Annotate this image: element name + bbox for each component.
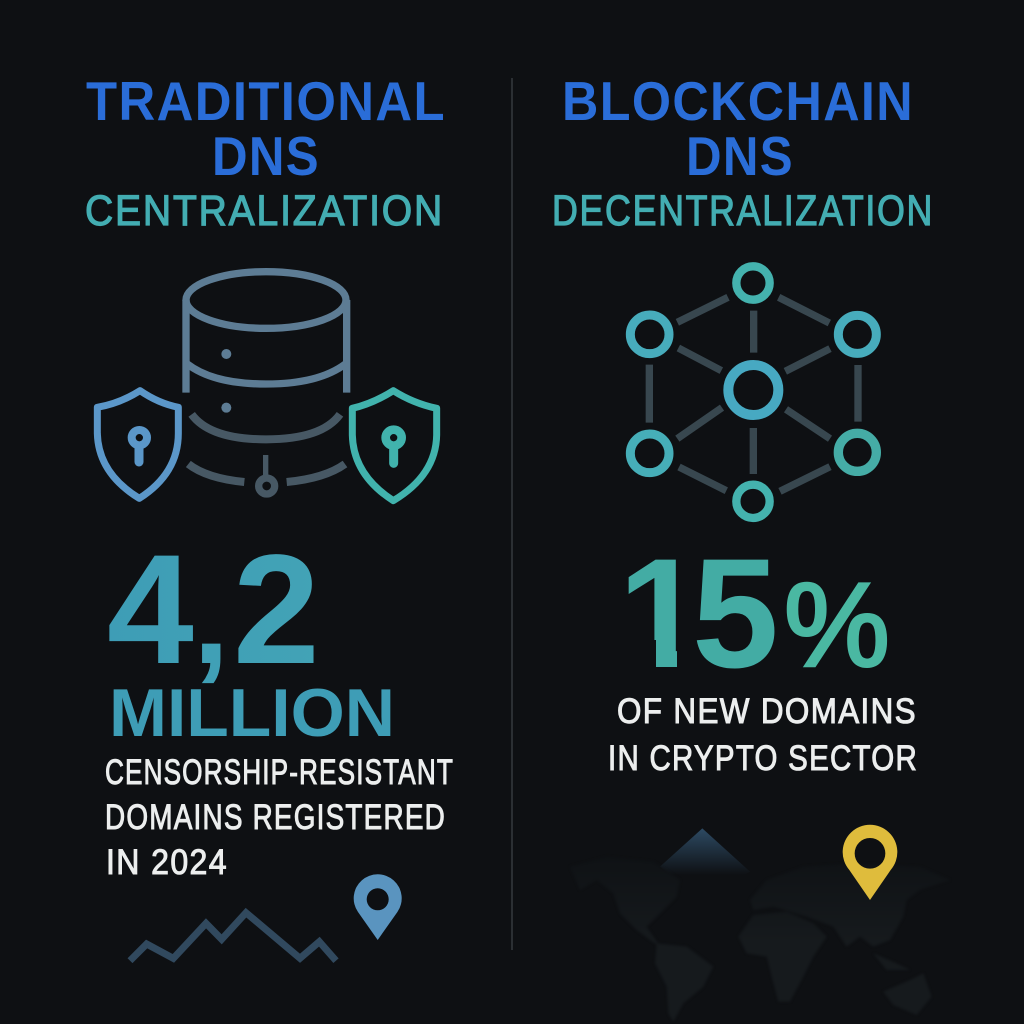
text block: censorship-resistant domains: IN 2024	[106, 843, 228, 882]
stat: 4,2: ,	[193, 545, 229, 691]
stat: 15 percent: 1	[618, 527, 705, 701]
icon: database cylinder	[186, 272, 347, 413]
subheading: centralization: CENTRALIZATION	[85, 187, 444, 235]
stat: 15 percent: 5	[692, 527, 779, 701]
heading: blockchain DNS: BLOCKCHAIN	[562, 70, 914, 132]
text block: censorship-resistant domains	[105, 753, 454, 882]
icon: yellow map pin	[843, 825, 897, 900]
icon: teal shield with keyhole	[352, 391, 437, 501]
text block: censorship-resistant domains: DOMAINS REGISTERED	[105, 798, 446, 837]
icon: decentralized network	[630, 266, 876, 518]
text block: censorship-resistant domains: CENSORSHIP-RESISTANT	[105, 753, 454, 792]
network links	[649, 297, 858, 491]
decorative blue diamond	[660, 828, 750, 900]
heading: blockchain DNS	[562, 70, 914, 187]
icon: blue map pin	[354, 874, 402, 940]
stat: 4,2: 4	[107, 523, 194, 697]
network nodes	[630, 266, 876, 518]
stat: 15 percent	[610, 527, 890, 701]
heading: traditional DNS: TRADITIONAL	[86, 70, 446, 132]
subheading: decentralization: DECENTRALIZATION	[552, 187, 934, 235]
text block: of new domains in crypto sector	[608, 692, 918, 778]
stat unit: million: MILLION	[109, 675, 395, 751]
heading: traditional DNS	[86, 70, 446, 187]
icon: trend line	[130, 913, 336, 961]
heading: blockchain DNS: DNS	[686, 125, 794, 187]
icon: lower database tiers	[188, 414, 345, 494]
heading: traditional DNS: DNS	[212, 125, 320, 187]
stat: 4,2: 2	[233, 523, 320, 697]
text block: of new domains in crypto sector: OF NEW DOMAINS	[617, 692, 917, 731]
icon: blue shield with keyhole	[97, 391, 178, 498]
panel: blockchain DNS	[552, 70, 950, 1022]
panel: traditional DNS	[85, 70, 454, 961]
text block: of new domains in crypto sector: IN CRYPTO SECTOR	[608, 739, 918, 778]
world map silhouette	[570, 857, 950, 1022]
world map and pins	[570, 825, 950, 1022]
icon: database with shields	[97, 272, 437, 501]
center divider	[511, 78, 513, 950]
stat: 15 percent: %	[784, 559, 890, 692]
